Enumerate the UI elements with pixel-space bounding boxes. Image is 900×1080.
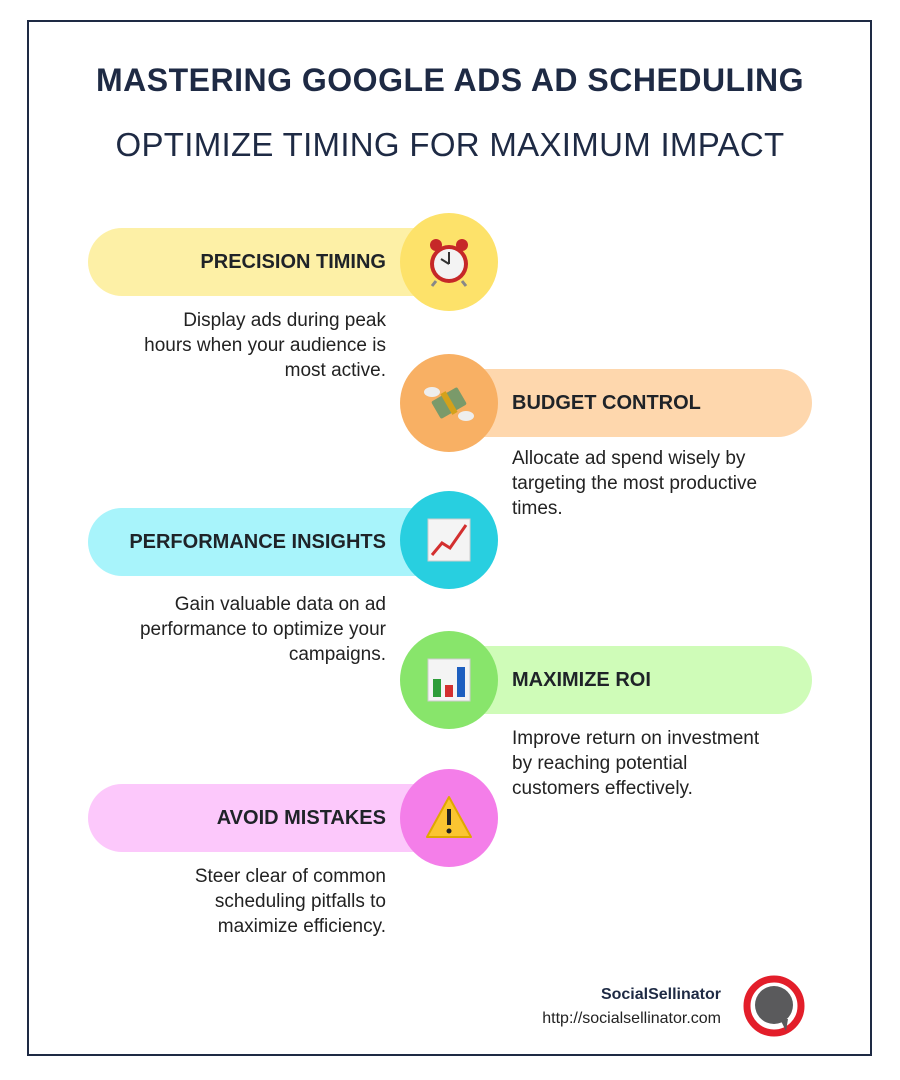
icon: bar chart (400, 631, 498, 729)
icon: money with wings (400, 354, 498, 452)
subtitle: OPTIMIZE TIMING FOR MAXIMUM IMPACT (116, 126, 784, 163)
logo (744, 976, 804, 1036)
icon: warning (400, 769, 498, 867)
description: performance insights: Gain valuable data on ad performance to optimize your campaigns. (140, 594, 386, 665)
item: budget control pill (450, 369, 812, 437)
description: budget control: Allocate ad spend wisely by targeting the most productive times. (512, 448, 757, 519)
title: MASTERING GOOGLE ADS AD SCHEDULING (96, 62, 804, 98)
item: performance insights pill (88, 508, 448, 576)
description: maximize roi: Improve return on investment by reaching potential customers effectively. (512, 728, 759, 799)
item: avoid mistakes pill (88, 784, 448, 852)
item: maximize roi pill: MAXIMIZE ROI (512, 669, 651, 691)
icon: chart increasing (400, 491, 498, 589)
description: avoid mistakes: Steer clear of common scheduling pitfalls to maximize efficiency. (195, 866, 386, 937)
item: precision timing pill: PRECISION TIMING (200, 251, 386, 273)
item: avoid mistakes pill: AVOID MISTAKES (217, 807, 386, 829)
footer brand: SocialSellinator (601, 986, 721, 1003)
item: budget control pill: BUDGET CONTROL (512, 392, 701, 414)
item: performance insights pill: PERFORMANCE INSIGHTS (129, 531, 386, 553)
item: maximize roi pill (450, 646, 812, 714)
icon: alarm clock (400, 213, 498, 311)
item: precision timing pill (88, 228, 448, 296)
footer brand (542, 986, 721, 1027)
description: precision timing: Display ads during peak hours when your audience is most active. (144, 310, 386, 381)
footer brand: http://socialsellinator.com (542, 1010, 721, 1027)
